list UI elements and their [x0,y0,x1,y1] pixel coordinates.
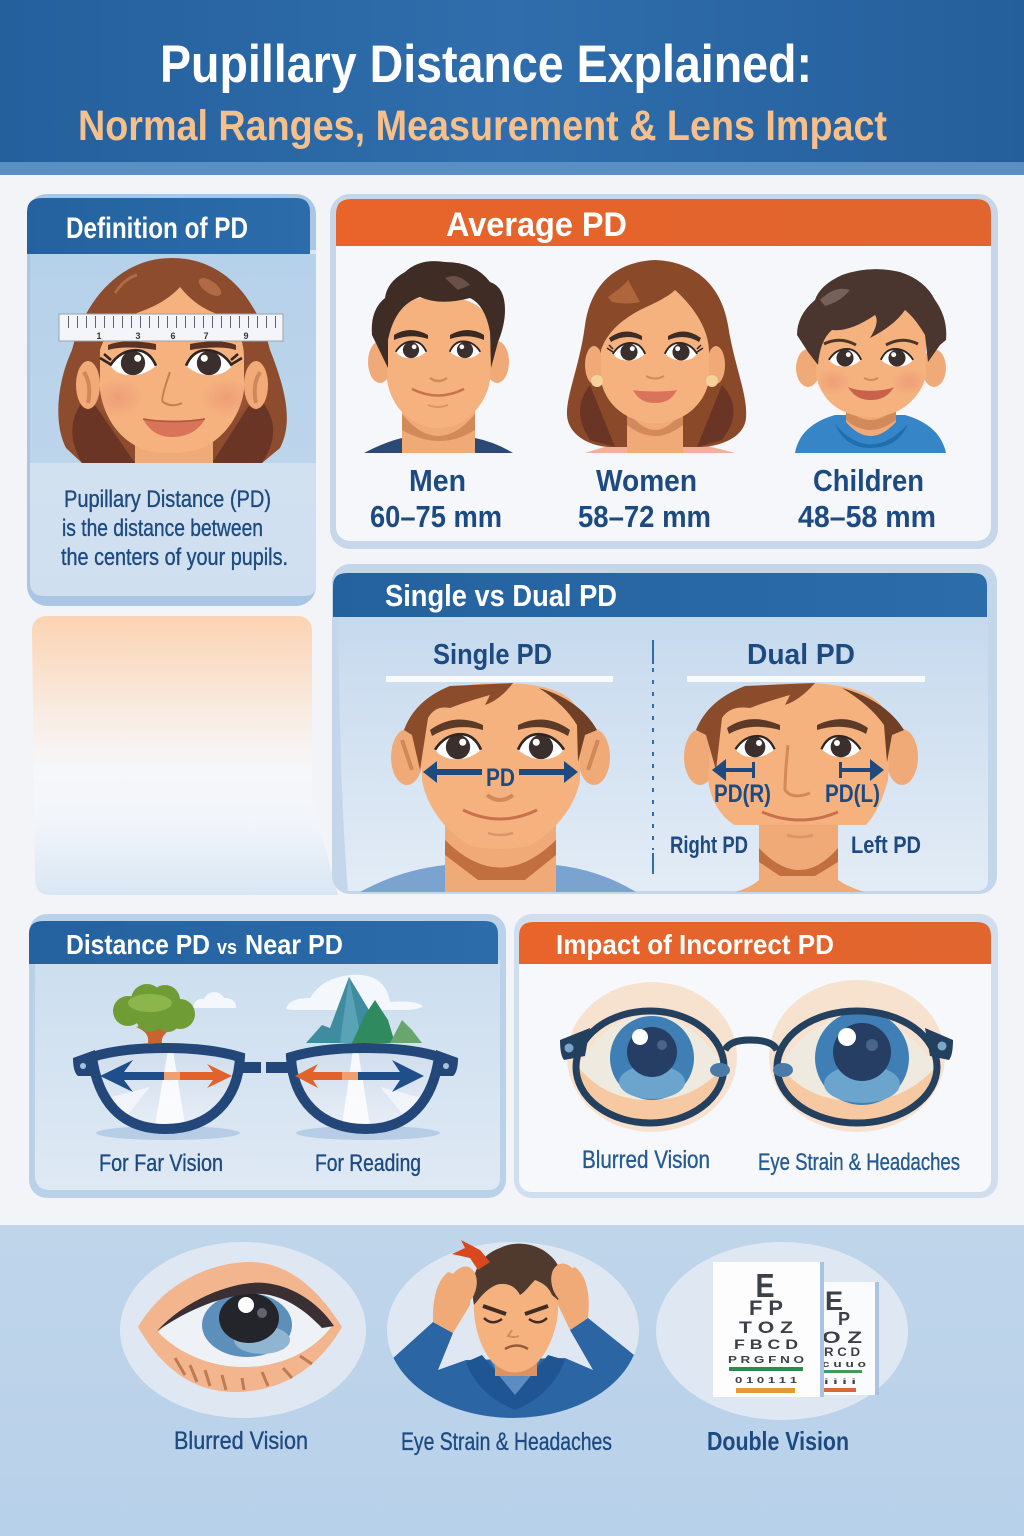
heading: distance vs near: Distance PD [66,929,210,960]
illustration: woman [567,260,746,453]
group labels: men: 60–75 mm [370,499,502,534]
back chart: E [825,1286,843,1316]
illustration: mountain and cloud [286,975,423,1043]
label: left PD: Left PD [851,832,921,859]
panel: distance vs near PD [29,914,506,1198]
label: right PD: Right PD [670,832,748,859]
heading: average PD: Average PD [446,206,627,244]
label: PD(R): PD(R) [714,780,771,808]
back chart [820,1282,879,1395]
label: for far vision: For Far Vision [99,1150,223,1177]
illustration: woman with ruler [58,258,287,463]
arrow: right PD [712,759,755,781]
heading: distance vs near: Near PD [245,929,343,960]
label: PD(L): PD(L) [825,780,880,808]
label: double vision: Double Vision [707,1426,849,1456]
illustration: dual PD face [684,683,918,892]
panel: definition of PD [27,194,316,606]
arrow: far vision [100,1060,232,1092]
definition text: the centers of your pupils. [61,544,288,571]
group labels: men [370,463,502,534]
ruler: 1 [96,331,102,341]
heading: distance vs near: vs [217,937,237,959]
group labels: children [798,463,936,534]
panel: average PD [330,194,998,549]
front chart [713,1262,824,1397]
illustration: man [364,261,513,453]
ruler: 6 [170,331,176,341]
heading: distance vs near [66,929,343,960]
illustration: tree and cloud [113,984,236,1043]
title: Pupillary Distance Explained: [160,35,812,94]
ruler: 9 [243,331,249,341]
front chart: F P [749,1297,783,1320]
group labels: women: Women [596,463,697,498]
back chart: O Z [822,1328,862,1347]
group labels: women: 58–72 mm [578,499,711,534]
label: eye strain: Eye Strain & Headaches [401,1428,612,1456]
icon: double vision eye chart [656,1242,908,1420]
front chart: E [756,1267,774,1304]
heading: definition: Definition of PD [66,212,248,245]
label: PD: PD [486,764,515,792]
panel: blank gradient card [32,616,338,895]
sub-heading: single: Single PD [433,639,552,671]
group labels: women [578,463,711,534]
arrow: left PD [839,759,884,781]
panel: impact of incorrect PD [514,914,998,1198]
ruler [59,314,283,341]
group labels: men: Men [409,463,466,498]
panel: single vs dual PD [332,564,997,894]
header banner [0,0,1024,175]
heading: single vs dual: Single vs Dual PD [385,578,617,613]
illustration: single PD face [360,683,636,892]
back chart: c u u o [822,1359,867,1369]
label: blurred vision: Blurred Vision [174,1427,308,1455]
definition text [61,486,288,571]
illustration: glasses with PD arrows [73,1048,458,1129]
ruler: 7 [203,331,209,341]
shadow under lenses [96,1126,240,1140]
label: eye strain: Eye Strain & Headaches [758,1149,960,1176]
arrow: single PD [423,761,578,783]
icon: blurred eye [120,1242,366,1418]
label: blurred vision: Blurred Vision [582,1146,710,1174]
front chart: F B C D [734,1336,798,1352]
subtitle: Normal Ranges, Measurement & Lens Impact [78,102,887,150]
back chart: i i i i [824,1379,856,1386]
ruler: 3 [135,331,141,341]
front chart: P R G F N O [728,1355,804,1366]
heading: impact: Impact of Incorrect PD [556,929,834,960]
back chart: R C D [824,1345,860,1359]
icon: headache person [385,1240,640,1420]
front chart: T O Z [739,1318,793,1337]
bottom band [0,1225,1024,1536]
sub-heading: dual: Dual PD [747,639,855,671]
group labels: children: 48–58 mm [798,499,936,534]
label: for reading: For Reading [315,1150,421,1177]
definition text: is the distance between [62,515,263,542]
illustration: eyes behind glasses [560,980,953,1132]
definition text: Pupillary Distance (PD) [64,486,271,513]
illustration: child [795,269,946,453]
arrow: reading [295,1060,424,1092]
back chart: P [838,1309,850,1329]
group labels: children: Children [813,463,924,498]
front chart: 0 1 0 1 1 1 [735,1376,798,1385]
